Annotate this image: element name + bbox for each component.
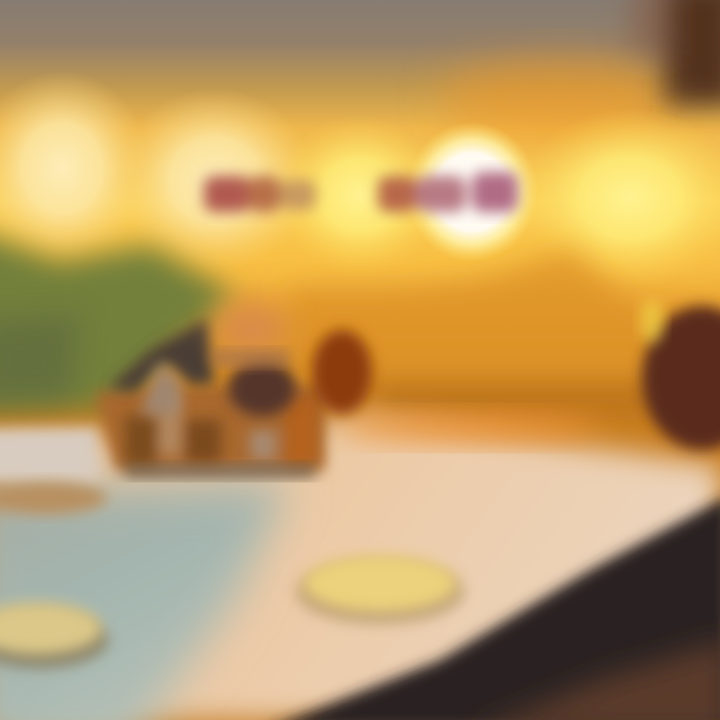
- dark top-right corner: [630, 0, 720, 105]
- green hills on the left: [0, 225, 235, 415]
- house gable: [140, 362, 180, 415]
- blurred sign lettering: [204, 172, 518, 212]
- dark ball on the right: [640, 300, 720, 450]
- round red-brown object: [312, 330, 372, 414]
- house upper peak: [216, 302, 288, 354]
- dark book corner: [265, 495, 720, 720]
- sun: [406, 122, 538, 262]
- house body: [95, 385, 325, 470]
- white paper stack: [0, 428, 107, 514]
- left gold coin: [0, 602, 108, 668]
- house windows: [125, 390, 317, 465]
- model house: [95, 302, 325, 478]
- house roof left: [108, 318, 214, 392]
- house midsection: [212, 350, 290, 366]
- table surface: [0, 415, 720, 720]
- orange table glow: [340, 414, 600, 442]
- house base shadow: [125, 464, 315, 478]
- large gold coin: [296, 555, 464, 624]
- blue-grey mat: [0, 482, 290, 720]
- green hills shade: [0, 315, 80, 405]
- glowing bokeh orbs: [0, 70, 720, 288]
- distant orange mountains: [270, 250, 720, 410]
- house roof right: [228, 360, 296, 416]
